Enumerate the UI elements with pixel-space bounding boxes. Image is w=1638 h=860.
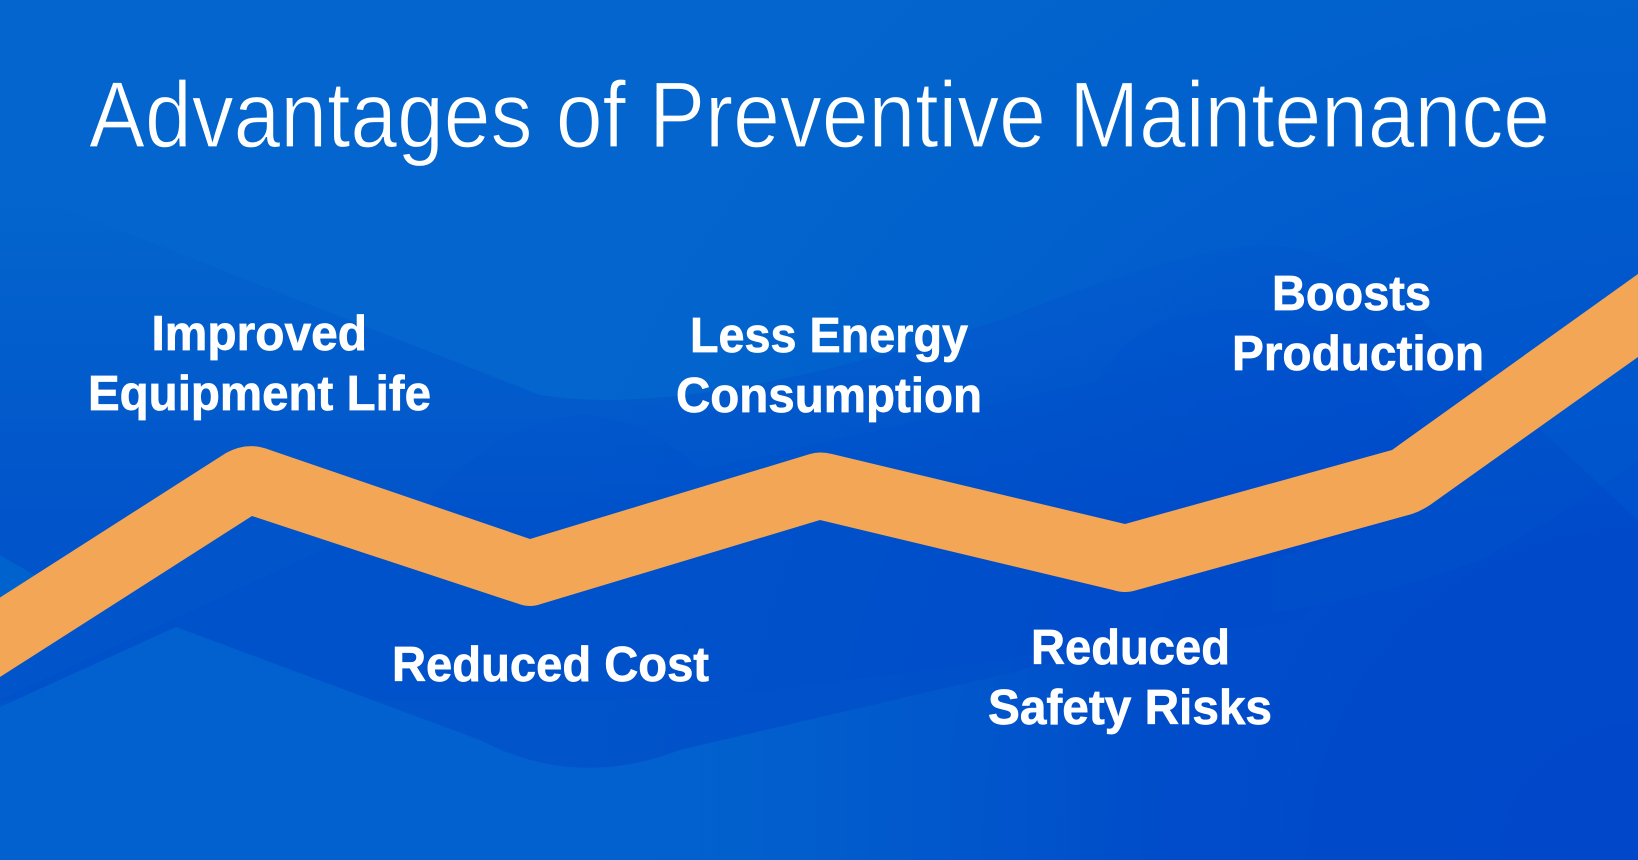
label: Reduced Safety Risks	[988, 621, 1272, 735]
label: Less Energy Consumption: Consumption	[676, 369, 982, 423]
background wave: lower left light corner	[0, 555, 60, 640]
orange trend ribbon	[0, 274, 1638, 677]
label: Less Energy Consumption: Less Energy	[690, 309, 968, 363]
background wave: lower light foreground	[1272, 357, 1638, 613]
label: Reduced Cost: Reduced Cost	[392, 638, 709, 692]
label: Improved Equipment Life: Equipment Life	[88, 367, 431, 421]
label: Reduced Safety Risks: Safety Risks	[988, 681, 1272, 735]
label: Improved Equipment Life: Improved	[152, 307, 367, 361]
background wave: bottom lighter area	[0, 627, 1150, 860]
label: Improved Equipment Life	[88, 307, 431, 421]
background wave: central dark hills	[0, 309, 1450, 700]
label: Reduced Safety Risks: Reduced	[1031, 621, 1230, 675]
label: Boosts Production: Boosts	[1272, 267, 1431, 321]
label: Less Energy Consumption	[676, 309, 982, 423]
label: Boosts Production: Production	[1232, 327, 1484, 381]
background wave: upper dark band	[0, 183, 1638, 860]
label: Boosts Production	[1232, 267, 1484, 381]
